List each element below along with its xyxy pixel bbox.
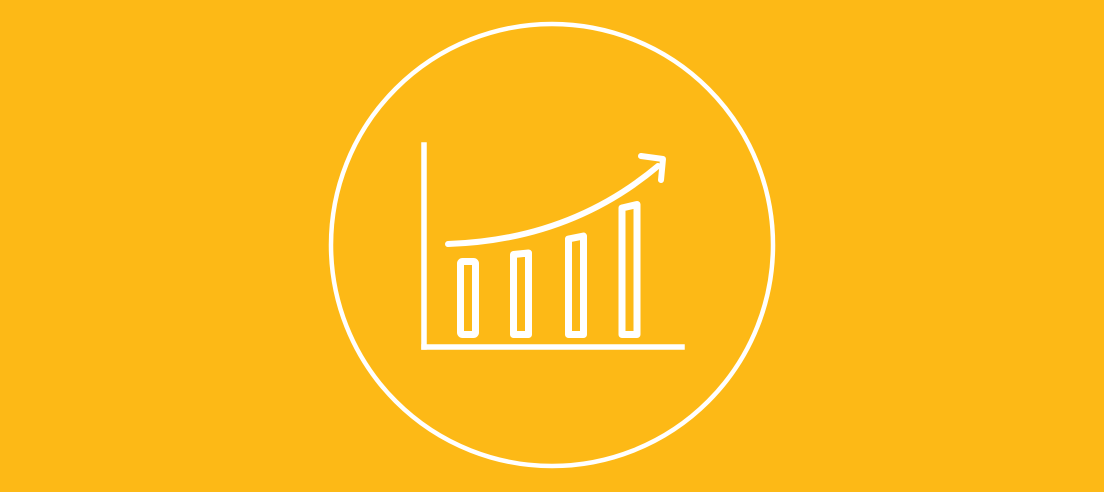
chart axes (424, 145, 682, 347)
icon: circle outline (331, 24, 773, 466)
bars (460, 204, 637, 334)
arrow: rising curve (448, 156, 663, 244)
